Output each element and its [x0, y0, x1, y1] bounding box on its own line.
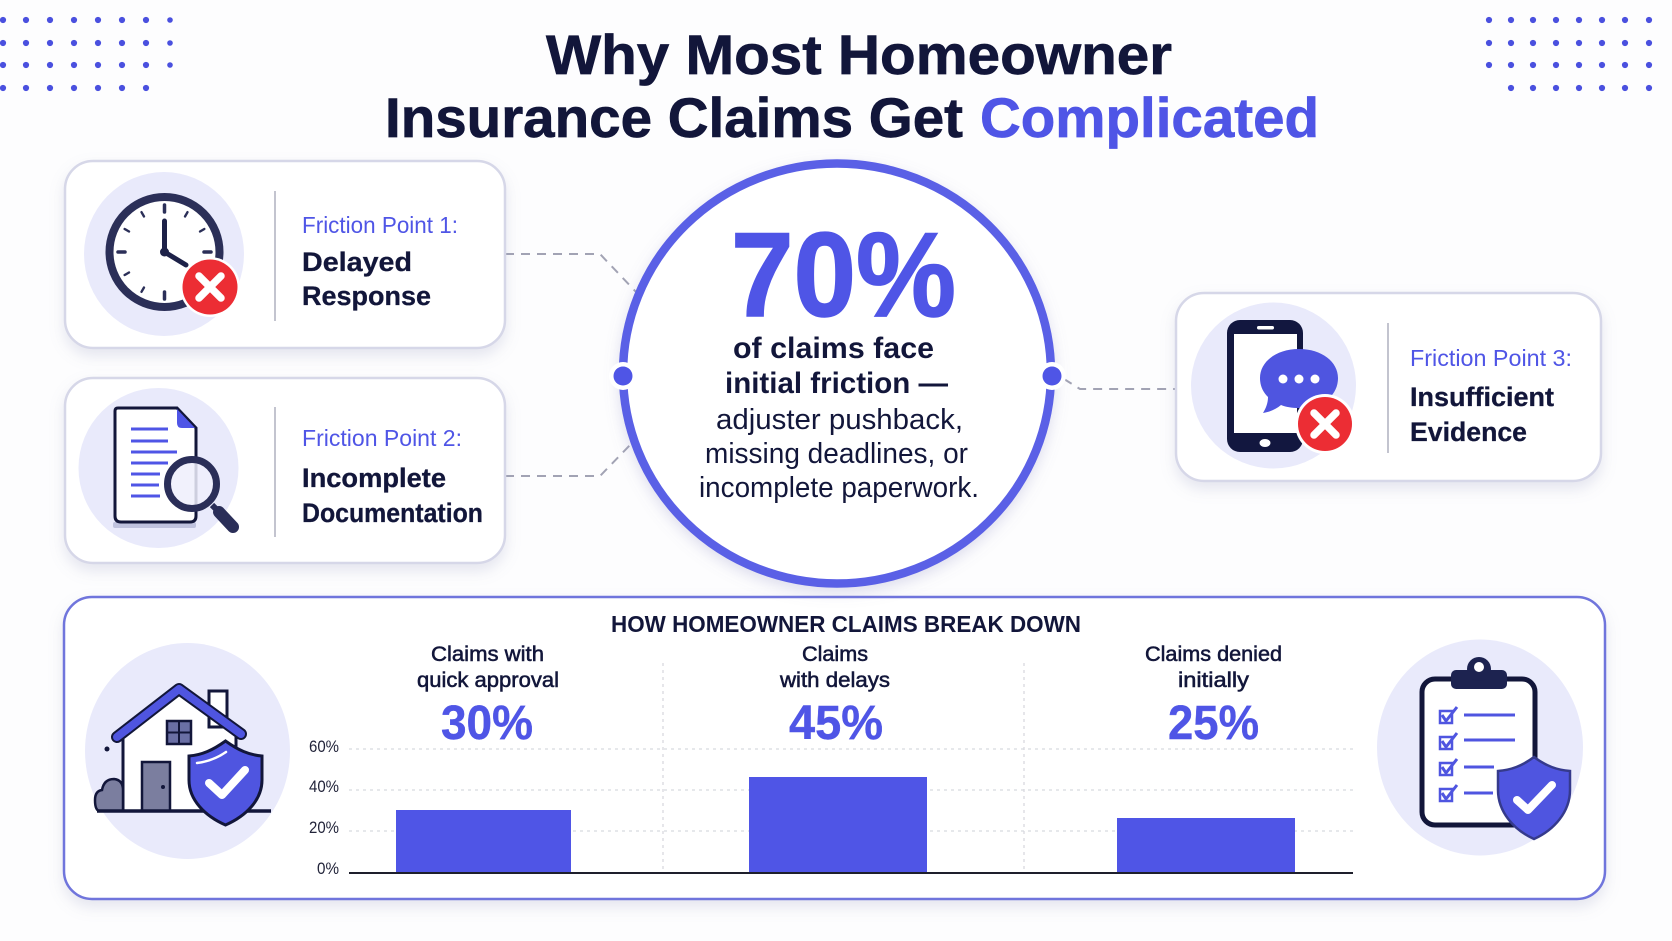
axis labels: 40%	[309, 777, 339, 796]
text: friction point 2 label	[302, 425, 483, 528]
bar chart: claims breakdown	[309, 663, 1353, 878]
axis labels: 60%	[309, 737, 339, 756]
bar: denied initially 25%	[1117, 818, 1295, 872]
stat: claims denied initially 25%: Claims denied	[1145, 643, 1282, 666]
axis labels: 0%	[317, 859, 339, 878]
text: friction point 2 label: Friction Point 2:	[302, 425, 462, 451]
stat: claims with delays 45%: with delays	[779, 669, 890, 692]
text: friction point 2 label: Documentation	[302, 498, 483, 528]
text: circle description: of claims face	[733, 332, 934, 365]
bar: quick approval 30%	[396, 810, 571, 872]
stat: claims denied initially 25%	[1145, 643, 1282, 750]
text: friction point 1 label	[302, 212, 458, 311]
arrow: connector from friction point 2 to centre circle	[505, 443, 632, 476]
text: circle description: adjuster pushback,	[716, 404, 963, 436]
stat: claims with delays 45%	[779, 643, 890, 750]
decorative dot grid: top left	[0, 17, 173, 91]
panel: bottom claims breakdown	[64, 597, 1605, 899]
text: friction point 3 label: Friction Point 3:	[1410, 345, 1572, 371]
panel: friction point 1	[65, 161, 505, 348]
arrow: connector from friction point 1 to centre circle	[505, 254, 637, 293]
text: friction point 2 label: Incomplete	[302, 463, 446, 493]
text: circle description: missing deadlines, or	[705, 438, 968, 470]
stat: claims with delays 45%: Claims	[802, 643, 868, 666]
title: Insurance Claims Get	[385, 86, 963, 149]
text: friction point 1 label: Response	[302, 281, 431, 311]
icon: clipboard with shield	[1377, 640, 1583, 856]
icon: phone with chat bubble and red x	[1191, 302, 1356, 468]
connector node: right	[1038, 362, 1066, 390]
stat: 70%: 70%	[731, 208, 956, 342]
title: Why Most Homeowner	[546, 23, 1172, 86]
panel: friction point 2	[65, 378, 505, 563]
icon: clock with red x	[84, 172, 244, 336]
text: circle description: incomplete paperwork.	[699, 472, 979, 504]
arrow: connector from centre circle to friction point 3	[1064, 379, 1176, 389]
text: friction point 3 label: Evidence	[1410, 417, 1527, 447]
stat: claims with quick approval 30%: quick approval	[417, 669, 559, 692]
stat: claims denied initially 25%: initially	[1178, 669, 1250, 692]
stat: claims with quick approval 30%: 30%	[441, 697, 533, 750]
title	[385, 23, 1319, 149]
text: circle description	[699, 332, 979, 504]
text: friction point 3 label	[1410, 345, 1572, 447]
icon: house with shield	[85, 643, 290, 859]
title: Complicated	[980, 86, 1319, 149]
panel: friction point 3	[1176, 293, 1601, 481]
text: circle description: initial friction —	[725, 367, 948, 400]
stat: claims denied initially 25%: 25%	[1168, 697, 1259, 750]
axis labels: 20%	[309, 818, 339, 837]
stat: claims with quick approval 30%	[417, 643, 559, 750]
text: friction point 3 label: Insufficient	[1410, 382, 1554, 412]
text: friction point 1 label: Delayed	[302, 247, 412, 277]
stat: claims with delays 45%: 45%	[789, 697, 883, 750]
bar: with delays 45%	[749, 777, 927, 872]
icon: document with magnifier	[78, 388, 238, 548]
connector node: left	[609, 362, 637, 390]
heading: how homeowner claims break down: HOW HOMEOWNER CLAIMS BREAK DOWN	[611, 611, 1081, 637]
axis labels	[309, 737, 339, 878]
decorative dot grid: top right	[1486, 17, 1652, 91]
text: friction point 1 label: Friction Point 1:	[302, 212, 458, 238]
panel: centre 70% circle	[609, 164, 1066, 584]
stat: claims with quick approval 30%: Claims with	[431, 643, 544, 666]
